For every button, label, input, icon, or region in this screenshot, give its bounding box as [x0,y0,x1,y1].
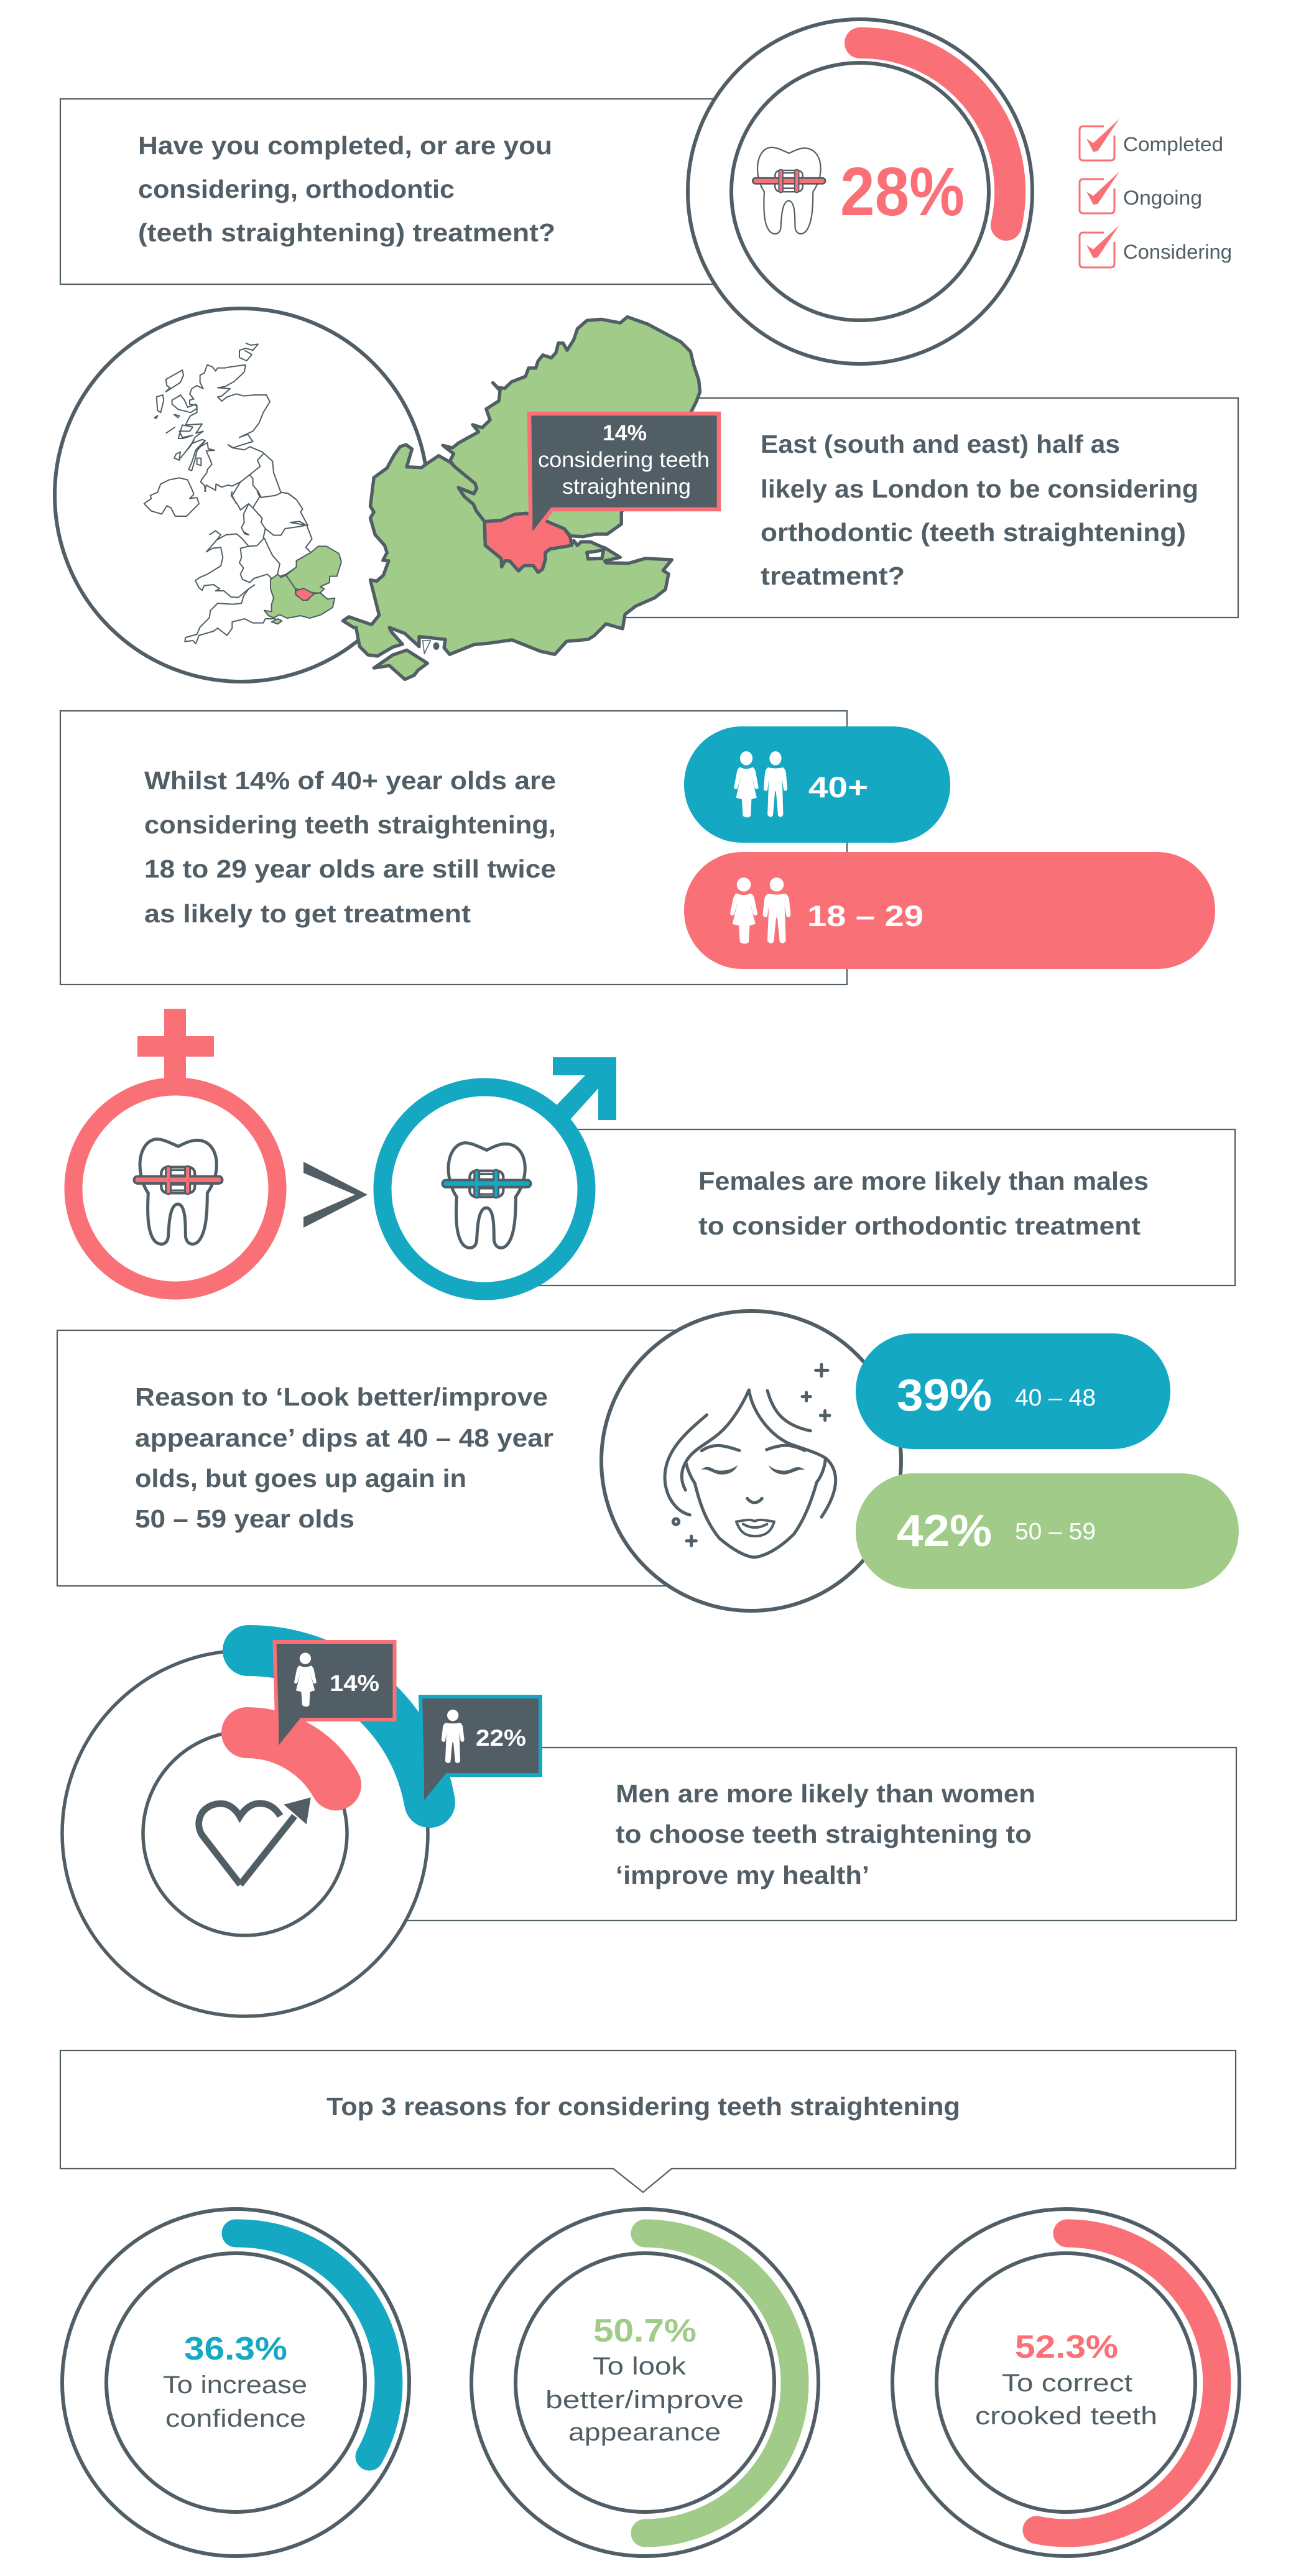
checkbox: considering: Considering [1123,241,1232,263]
panel: top 3 reasons [60,2050,1239,2556]
greater-than arrow [303,1162,368,1228]
icon: tooth with blue braces [443,1143,530,1248]
text box [60,711,847,985]
question text [138,131,555,247]
callout: women 14%: 14% [330,1670,379,1696]
question text: considering, orthodontic [138,175,455,203]
bar: 18 – 29 [684,852,1215,969]
bar: 39% aged 40 – 48: 39% [897,1371,992,1420]
legend: checkboxes [1080,119,1232,267]
panel: health reason [62,1642,1236,2016]
panel: age comparison [60,711,1215,985]
age text: as likely to get treatment [144,899,471,928]
text box outline [535,1129,1235,1286]
checkbox: ongoing [1080,172,1202,213]
donut chart: 52.3% to correct crooked teeth: crooked teeth [975,2402,1157,2430]
donut chart: 36.3% to increase confidence: To increase [163,2371,307,2399]
donut chart: 52.3% to correct crooked teeth: To correct [1002,2370,1132,2397]
health text: Men are more likely than women [616,1779,1035,1808]
checkbox: considering [1080,225,1232,267]
panel: appearance reason [57,1311,1239,1611]
bar: 18 – 29: 18 – 29 [807,899,923,932]
icon: tooth with braces [752,147,825,234]
regional text: likely as London to be considering [761,475,1198,503]
face circle [601,1311,901,1611]
appearance text [135,1383,553,1533]
heading: Top 3 reasons for considering teeth straightening [326,2092,960,2121]
regional text [761,430,1198,590]
enlarged map: east and south east [343,317,700,679]
donut chart: 50.7% to look better: To look [593,2353,687,2380]
donut chart: health [62,1651,430,2016]
appearance text: 50 – 59 year olds [135,1504,354,1533]
question text: (teeth straightening) treatment? [138,218,555,247]
regional text: East (south and east) half as [761,430,1120,458]
donut chart: 50.7% to look better [471,2209,818,2556]
bar: 42% aged 50 – 59 [856,1473,1239,1589]
small UK map: Scotland and islands [144,343,297,516]
bar: 42% aged 50 – 59: 50 – 59 [1015,1519,1096,1545]
donut chart: 50.7% to look better: better/improve [545,2386,744,2414]
callout: 14% considering: considering teeth [538,448,710,472]
donut chart: 50.7% to look better: 50.7% [593,2313,697,2349]
checkbox: ongoing: Ongoing [1123,187,1202,209]
donut chart: 28% [688,19,1032,364]
donut chart: 52.3% to correct crooked teeth: 52.3% [1015,2329,1118,2365]
regional text: orthodontic (teeth straightening) [761,518,1186,547]
regional text: treatment? [761,562,905,590]
question text: Have you completed, or are you [138,131,552,160]
map circle [55,308,428,682]
icon: tooth with pink braces [134,1139,222,1244]
callout: 14% considering [529,414,719,537]
bar: 42% aged 50 – 59: 42% [897,1506,992,1556]
text box outline [398,1748,1236,1920]
health text: to choose teeth straightening to [616,1820,1032,1848]
donut chart: 36.3% to increase confidence: 36.3% [184,2331,287,2367]
bar: 40+: 40+ [808,771,868,804]
heading box with pointer [60,2050,1236,2192]
age text: 18 to 29 year olds are still twice [144,855,556,883]
question box [60,99,744,284]
text box [57,1330,748,1586]
age text [144,766,556,928]
bar: 40+ [684,726,950,843]
icon: woman's face [665,1364,836,1557]
donut chart: 52.3% to correct crooked teeth [892,2209,1239,2556]
icon: female symbol [73,1009,277,1290]
callout: 14% considering: 14% [603,421,647,445]
icon: heart with arrow [199,1797,311,1884]
health text: ‘improve my health’ [616,1861,869,1889]
text box outline [622,398,1238,618]
age text: considering teeth straightening, [144,810,556,839]
icon: male symbol [382,1057,616,1291]
gender text: to consider orthodontic treatment [698,1212,1141,1240]
callout: 14% considering: straightening [562,475,691,499]
donut chart: 36.3% to increase confidence [62,2209,409,2556]
callout: women 14% [275,1642,394,1751]
gender text [698,1167,1149,1240]
gender text: Females are more likely than males [698,1167,1149,1195]
checkbox: completed: Completed [1123,133,1223,155]
appearance text: appearance’ dips at 40 – 48 year [135,1424,553,1452]
callout: men 22% [420,1697,540,1805]
age text: Whilst 14% of 40+ year olds are [144,766,556,795]
health text [616,1779,1035,1889]
bar: 39% aged 40 – 48: 40 – 48 [1015,1385,1096,1411]
callout: men 22%: 22% [476,1725,526,1751]
donut chart: 36.3% to increase confidence: confidence [165,2405,306,2432]
panel: orthodontic treatment question [60,19,1232,364]
panel: gender comparison [73,1009,1235,1291]
appearance text: olds, but goes up again in [135,1464,466,1493]
small UK map: England, Wales and highlighted regions [185,491,341,644]
panel: regional map [55,308,1238,682]
donut chart: 50.7% to look better: appearance [568,2419,721,2446]
appearance text: Reason to ‘Look better/improve [135,1383,548,1411]
checkbox: completed [1080,119,1223,160]
statistic: 28%: 28% [840,154,965,230]
bar: 39% aged 40 – 48 [856,1333,1170,1449]
